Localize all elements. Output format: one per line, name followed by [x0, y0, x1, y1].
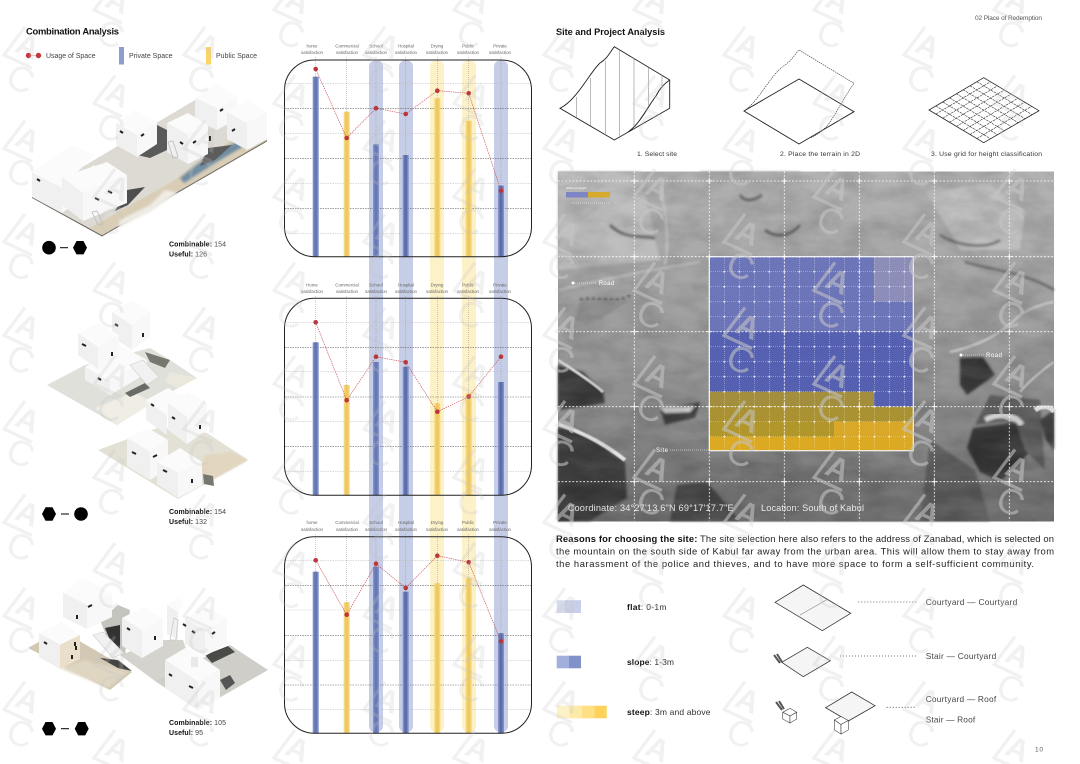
- chart 2 column labels: School: [369, 282, 383, 288]
- chart 2 column labels: Drying: [431, 282, 444, 288]
- chart 3 column labels: Commercial: [335, 520, 359, 525]
- chart 2 column labels: satisfaction: [336, 289, 359, 294]
- road label right: Road: [986, 353, 1002, 359]
- chart 1 column labels: satisfaction: [336, 50, 359, 55]
- isometric model 2: [47, 300, 248, 499]
- combination icons 1: circle and hexagon: [42, 241, 87, 254]
- grid crosses: [631, 178, 1012, 485]
- legend: flat: flat: 0-1m: [627, 602, 666, 612]
- stats 1: Combinable: 154: [169, 242, 226, 248]
- diagram: grid for height classification: [929, 78, 1042, 158]
- chart 2 column labels: satisfaction: [426, 289, 449, 294]
- connection: courtyard and stair to roof: Stair — Roof: [926, 714, 976, 724]
- chart 3 column labels: satisfaction: [365, 527, 388, 532]
- legend: flat: [557, 600, 666, 613]
- chart 2 column labels: satisfaction: [301, 289, 324, 294]
- chart 2 column labels: satisfaction: [457, 289, 480, 294]
- chart 3: [284, 520, 532, 733]
- chart 3 column labels: Drying: [431, 520, 444, 525]
- stats 2: Combinable: 154: [169, 509, 226, 516]
- diagram: select site: [560, 47, 677, 158]
- height overlay: blue and yellow grid: [709, 257, 913, 451]
- chart 3 column labels: satisfaction: [336, 527, 359, 532]
- road label left: [572, 281, 614, 287]
- chart 1 bars: [313, 77, 504, 257]
- chart 1 column labels: satisfaction: [457, 50, 480, 55]
- chart 3 column labels: satisfaction: [457, 527, 480, 532]
- chart 1 column labels: satisfaction: [365, 50, 388, 55]
- chart 2 column labels: satisfaction: [395, 289, 418, 294]
- chart 1 column labels: [301, 44, 512, 55]
- stats 3: [169, 720, 226, 737]
- legend: public space: [206, 47, 257, 64]
- isometric model 1: [32, 83, 267, 236]
- chart 3 column labels: Private: [493, 520, 507, 525]
- chart 3 column labels: School: [369, 520, 383, 525]
- connection: courtyard and stair to roof: Courtyard — Roof: [926, 694, 997, 704]
- legend: usage of space: [26, 53, 96, 60]
- terrain: [558, 172, 1054, 522]
- reasons paragraph: Reasons for choosing the site: The site selection here also refers to the address of Zanabad, which is selected on: [556, 533, 1054, 544]
- legend: private space: [119, 47, 173, 64]
- background bands through all charts: [369, 60, 508, 732]
- chart 2 column labels: [301, 282, 512, 294]
- stats 3: Combinable: 105: [169, 720, 226, 727]
- caption: 3. Use grid for height classification: [931, 151, 1042, 158]
- site map: [558, 172, 1054, 522]
- location text: Location: South of Kabul: [761, 503, 864, 513]
- isometric model 3: [28, 578, 268, 710]
- chart 3 column labels: satisfaction: [395, 527, 418, 532]
- chart 1 column labels: Drying: [431, 44, 444, 48]
- large coordinate grid: [558, 172, 1054, 521]
- connection: stair to courtyard: [774, 647, 997, 677]
- chart 2 column labels: satisfaction: [489, 289, 512, 294]
- chart 1 frame: [284, 60, 532, 257]
- chart 2 usage line: [313, 320, 503, 414]
- site label: [656, 448, 709, 454]
- chart 2 column labels: Hospital: [398, 282, 414, 288]
- chart 2: [284, 282, 532, 495]
- connection: courtyard to courtyard: Courtyard — Courtyard: [926, 597, 1018, 607]
- legend: slope: slope: 1-3m: [627, 657, 674, 667]
- stats 2: Useful: 132: [169, 519, 207, 526]
- chart 3 bars: [313, 567, 504, 733]
- caption: 1. Select site: [637, 151, 677, 158]
- chart 1 column labels: satisfaction: [489, 50, 512, 55]
- chart 3 usage line: [313, 553, 503, 644]
- chart 3 column labels: Hospital: [398, 520, 414, 525]
- chart 1 column labels: Hospital: [398, 44, 414, 48]
- heading: combination analysis: Combination Analysis: [26, 26, 119, 36]
- stats 1: [169, 242, 226, 258]
- chart 1: [284, 44, 532, 257]
- chart 2 column labels: satisfaction: [365, 289, 388, 294]
- chart 3 column labels: satisfaction: [489, 527, 512, 532]
- mini legend: Different height: [566, 186, 586, 190]
- legend: slope: [557, 656, 674, 668]
- road label right: [960, 353, 1002, 359]
- stair: [130, 360, 159, 385]
- connection: stair to courtyard: Stair — Courtyard: [926, 651, 997, 661]
- chart 3 frame: [284, 537, 532, 733]
- legend: public space: Public Space: [216, 53, 257, 60]
- chart 3 column labels: satisfaction: [301, 527, 324, 532]
- reasons paragraph: the mountain on the south side of Kabul far away from the urban area. This will allow them to stay away from: [556, 546, 1054, 556]
- combination icons 2: hexagon and circle: [42, 507, 88, 521]
- chart 1 column labels: Commercial: [335, 44, 359, 48]
- diagram: place the terrain in 2D: [744, 50, 860, 158]
- coordinate text: Coordinate: 34°27'13.6"N 69°17'17.7"E: [568, 503, 734, 513]
- chart 1 column labels: Private: [493, 44, 507, 48]
- chart 1 column labels: School: [369, 44, 383, 48]
- chart 3 column labels: satisfaction: [426, 527, 449, 532]
- legend: usage of space: Usage of Space: [46, 53, 96, 60]
- chart 2 column labels: Public: [462, 282, 475, 288]
- combination icons 3: hexagon and hexagon: [42, 722, 89, 735]
- mini legend: [566, 186, 610, 203]
- chart 1 column labels: home: [307, 44, 318, 48]
- chart 2 column labels: Private: [493, 282, 507, 288]
- connection: courtyard to courtyard: [775, 585, 1018, 631]
- chart 1 usage line: [313, 67, 503, 193]
- legend: private space: Private Space: [129, 53, 173, 60]
- chart 3 column labels: [301, 520, 512, 532]
- chart 1 column labels: satisfaction: [395, 50, 418, 55]
- site label: Site: [656, 448, 669, 454]
- road label left: Road: [599, 281, 614, 287]
- stats 1: Useful: 126: [169, 252, 207, 258]
- chart 1 column labels: satisfaction: [426, 50, 449, 55]
- chart 2 column labels: Commercial: [335, 282, 359, 288]
- caption: 2. Place the terrain in 2D: [780, 151, 860, 158]
- running header: 02 Place of Redemption: [975, 15, 1042, 22]
- chart 2 frame: [284, 298, 532, 495]
- heading: site and project analysis: Site and Project Analysis: [556, 27, 665, 37]
- legend: steep: [557, 706, 711, 718]
- chart 2 bars: [313, 342, 504, 495]
- chart 1 column labels: Public: [462, 44, 475, 48]
- stats 3: Useful: 95: [169, 730, 203, 737]
- page number: 10: [1035, 746, 1043, 754]
- stair: [93, 632, 124, 658]
- reasons paragraph: [556, 533, 1054, 569]
- chart 3 column labels: Public: [462, 520, 475, 525]
- panel: combination analysis header: [26, 26, 257, 64]
- reasons paragraph: the harassment of the police and thieves, and to have more space to form a self-sufficient community.: [556, 558, 1034, 569]
- stats 2: [169, 509, 226, 526]
- chart 3 column labels: home: [307, 520, 318, 525]
- chart 2 column labels: Home: [306, 282, 318, 288]
- legend: steep: steep: 3m and above: [627, 707, 711, 717]
- chart 1 column labels: satisfaction: [301, 50, 324, 55]
- watermark overlay: map: [558, 172, 1054, 522]
- connection: courtyard and stair to roof: [776, 692, 997, 734]
